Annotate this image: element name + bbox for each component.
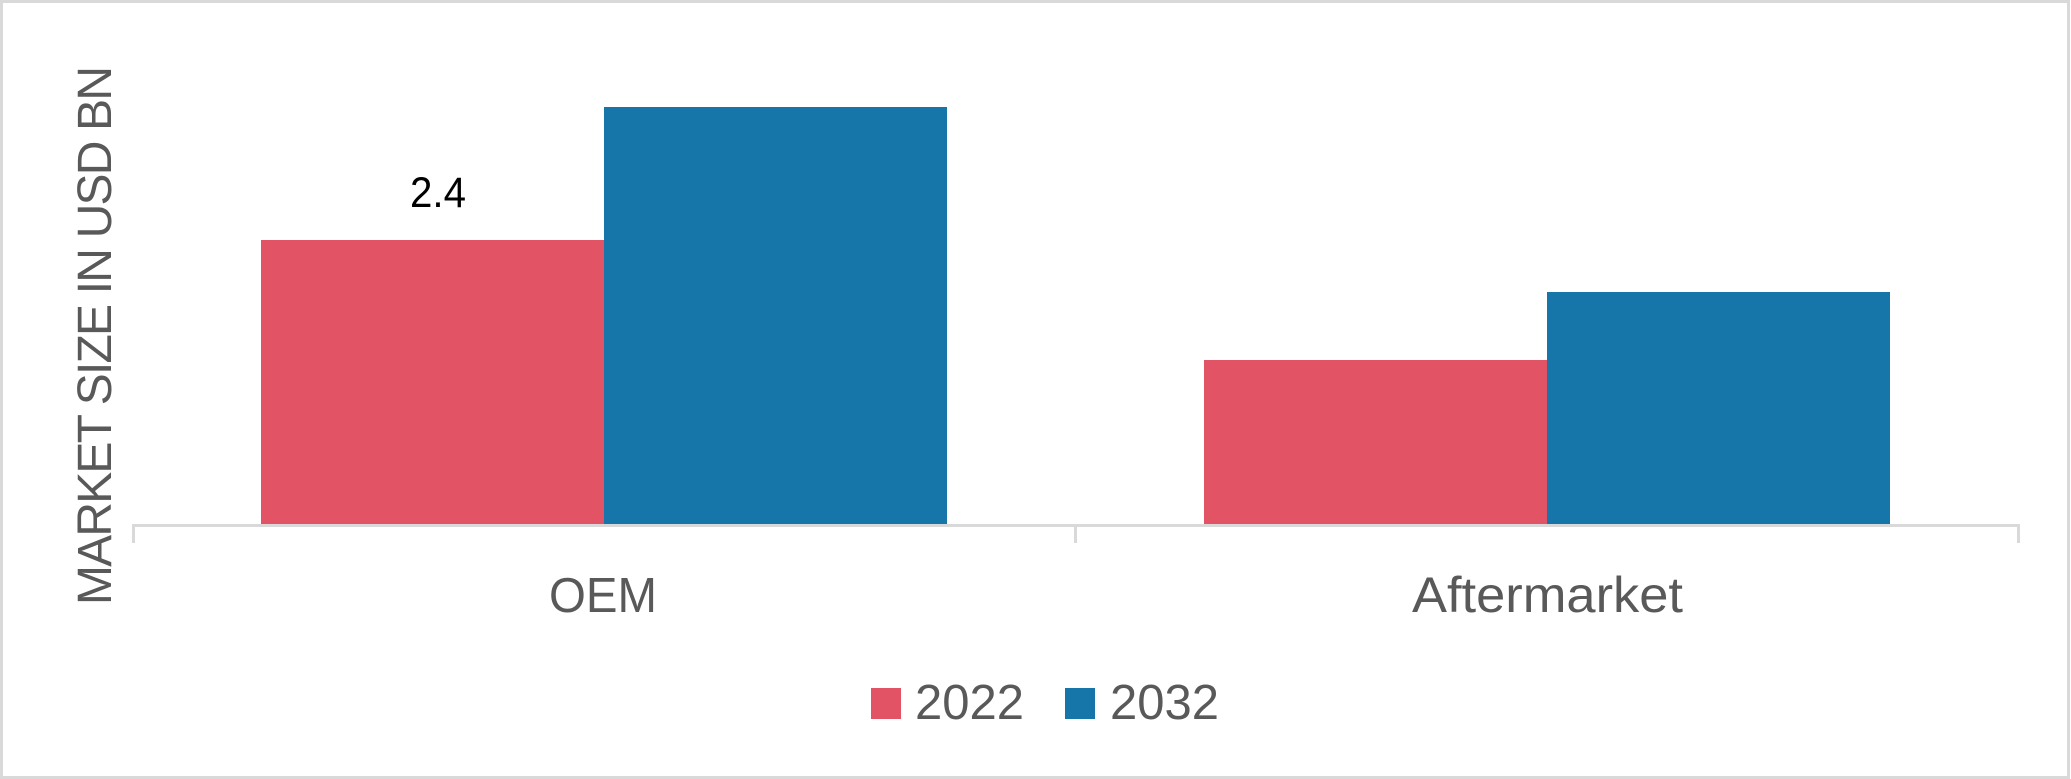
bar chart	[134, 107, 2018, 623]
category label: OEM: OEM	[549, 569, 657, 623]
category label: Aftermarket: Aftermarket	[1412, 567, 1683, 623]
legend swatch: 2022	[871, 688, 901, 719]
bar: OEM 2022	[261, 240, 604, 524]
bar: OEM 2032	[604, 107, 947, 524]
legend label: 2022: 2022	[915, 676, 1024, 730]
bar: Aftermarket 2032	[1547, 292, 1890, 524]
data label: 2.4: 2.4	[410, 169, 466, 217]
bar: Aftermarket 2022	[1204, 360, 1547, 524]
legend	[871, 676, 1219, 730]
legend label: 2032: 2032	[1110, 676, 1219, 730]
legend swatch: 2032	[1065, 688, 1095, 719]
y axis title: MARKET SIZE IN USD BN	[69, 66, 122, 605]
x axis	[134, 526, 2018, 543]
